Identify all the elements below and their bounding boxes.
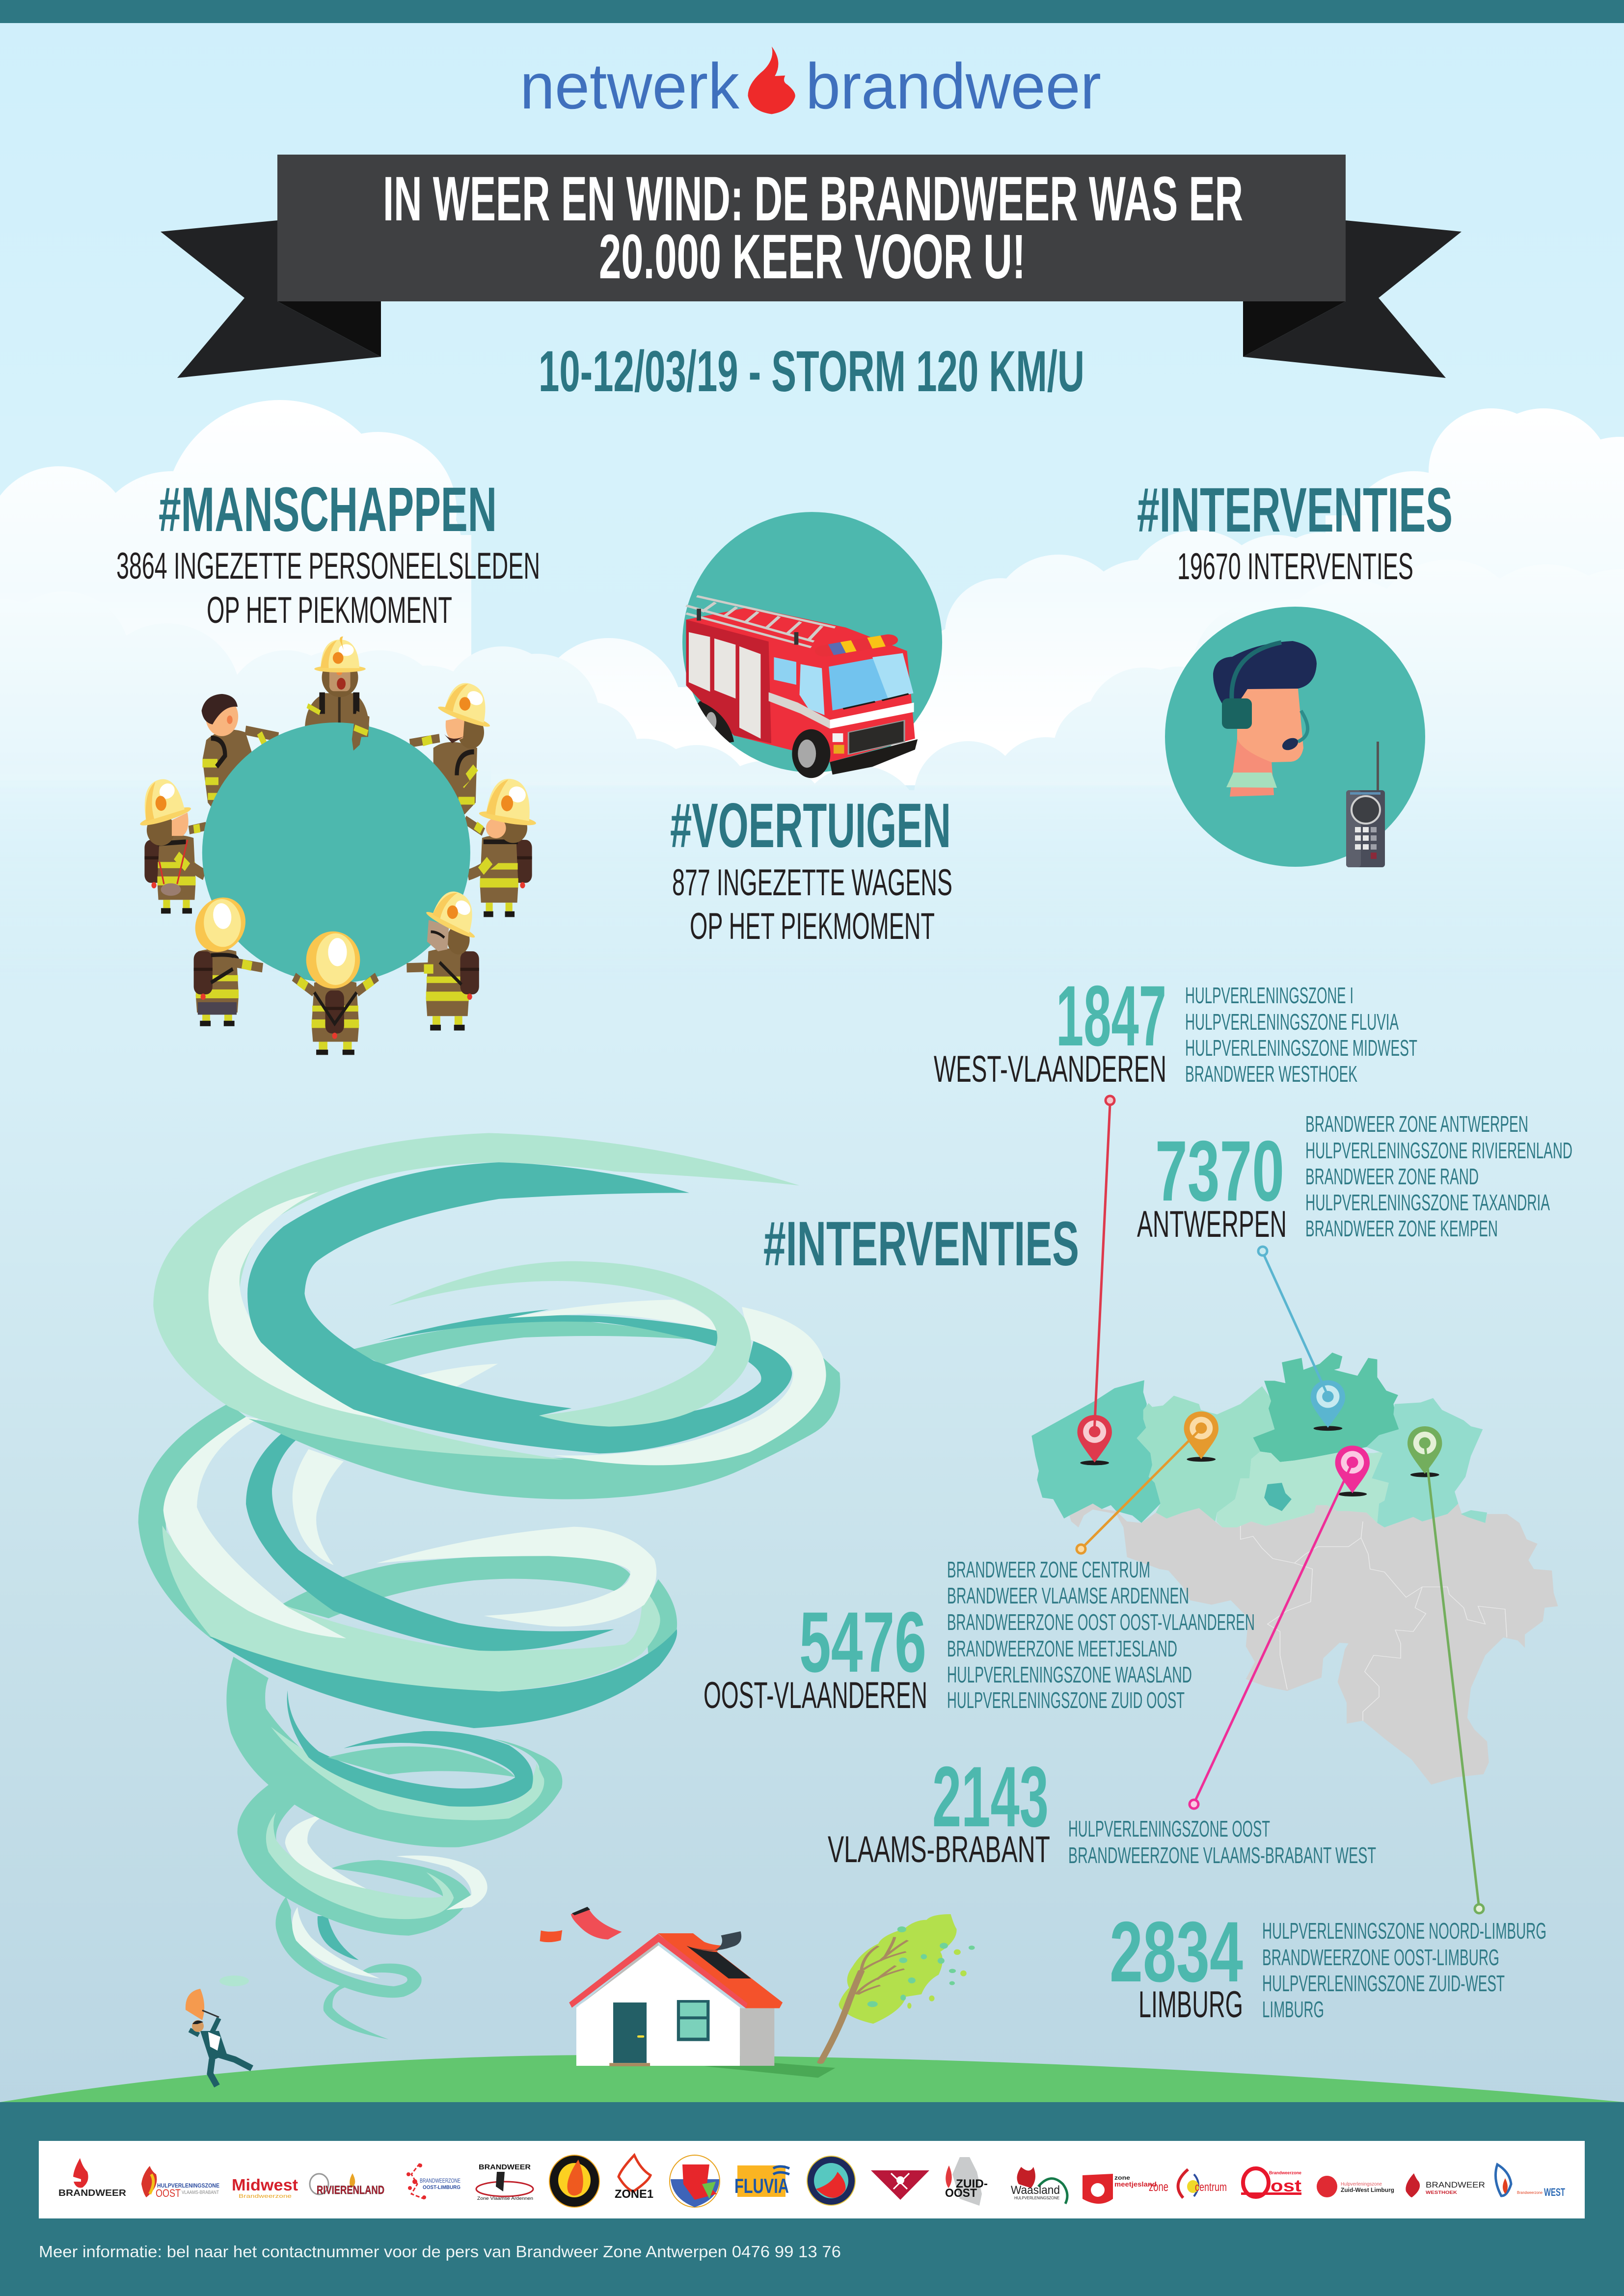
region: Oost-Vlaanderen: BRANDWEER ZONE CENTRUM xyxy=(947,1557,1150,1582)
text: manschappen stat xyxy=(116,545,540,631)
logo: Zuid-Oost: ZUID- xyxy=(956,2177,988,2190)
region: Antwerpen: BRANDWEER ZONE RAND xyxy=(1305,1164,1479,1189)
logo: Centrum xyxy=(1149,2169,1227,2198)
tornado: top ring xyxy=(153,1133,840,1499)
firefighter: top xyxy=(305,637,369,736)
firefighters circle illustration xyxy=(133,637,541,1055)
green ground hill xyxy=(0,2055,1624,2106)
logo: Fluvia: FLUVIA xyxy=(734,2174,789,2197)
region: West-Vlaanderen: 1847 xyxy=(1056,968,1166,1064)
logo: Rivierenland: RIVIERENLAND xyxy=(317,2184,384,2197)
fire truck illustration xyxy=(682,512,942,778)
firefighter: bottom xyxy=(294,932,377,1055)
logo: Zone1: ZONE1 xyxy=(615,2188,653,2201)
flying shingle red xyxy=(571,1907,622,1940)
logo: Zuid-Oost: OOST xyxy=(945,2187,977,2200)
region: Vlaams-Brabant: 2143 xyxy=(932,1749,1049,1845)
firefighter: bottom left xyxy=(189,889,263,1026)
tornado: second ring xyxy=(138,1403,677,1728)
logo: Taxandria xyxy=(549,2155,599,2207)
pin: Limburg xyxy=(1407,1426,1442,1477)
region: West-Vlaanderen: HULPVERLENINGSZONE MIDWEST xyxy=(1185,1035,1417,1061)
truck xyxy=(686,596,918,778)
hair xyxy=(1213,641,1317,714)
footer contact text: Meer informatie: bel naar het contactnummer voor de pers van Brandweer Zone Antwerpen 0476 99 13 76 xyxy=(39,2243,841,2261)
logo: Hulpverleningszone Oost: HULPVERLENINGSZONE xyxy=(157,2182,219,2189)
wind-blown tree xyxy=(820,1914,975,2062)
leader line: Oost-Vlaanderen xyxy=(1077,1428,1201,1553)
pin: Antwerpen xyxy=(1311,1380,1345,1431)
firefighter: right xyxy=(464,774,541,917)
logo: Zuid-West Limburg xyxy=(1317,2176,1394,2197)
arm band xyxy=(354,727,368,733)
logo: Brandweerzone Oost: ost xyxy=(1271,2177,1301,2195)
roof inner edge xyxy=(657,1934,748,2008)
logo: Rivierenland xyxy=(310,2173,384,2197)
teal circle xyxy=(202,722,470,983)
door step xyxy=(609,2063,650,2066)
logo: Vlaamse Ardennen: Zone Vlaamse Ardennen xyxy=(477,2196,533,2201)
region: Oost-Vlaanderen: BRANDWEER VLAAMSE ARDENNEN xyxy=(947,1583,1189,1608)
map: Voeren xyxy=(1461,1510,1487,1523)
footer band xyxy=(0,2102,1624,2296)
clouds: front layer xyxy=(0,646,1624,820)
logo: Oost-Limburg xyxy=(406,2163,460,2199)
logo: Hulpverleningszone Oost: VLAAMS-BRABANT xyxy=(182,2190,219,2195)
region: Vlaams-Brabant: VLAAMS-BRABANT xyxy=(828,1829,1050,1870)
leader line: Antwerpen xyxy=(1258,1247,1328,1396)
map: Brussels xyxy=(1264,1483,1292,1511)
side wall xyxy=(740,2008,774,2066)
walls xyxy=(576,1945,740,2066)
region: Oost-Vlaanderen: HULPVERLENINGSZONE WAASLAND xyxy=(947,1662,1192,1687)
flying shingle orange xyxy=(540,1930,562,1942)
text: voertuigen stat xyxy=(672,862,952,947)
text: manschappen stat: 3864 INGEZETTE PERSONEELSLEDEN xyxy=(116,545,540,587)
logo: Centrum: centrum xyxy=(1195,2181,1227,2194)
door knob xyxy=(637,2035,644,2038)
logo: Waasland: HULPVERLENINGSZONE xyxy=(1014,2196,1059,2200)
headset xyxy=(1232,642,1281,699)
foliage xyxy=(839,1914,957,2024)
heading: voertuigen: #VOERTUIGEN xyxy=(670,791,951,861)
tornado: third ring xyxy=(226,1656,562,1847)
leader line: Limburg xyxy=(1425,1443,1484,1913)
region: Oost-Vlaanderen xyxy=(704,1557,1255,1716)
region: Limburg: 2834 xyxy=(1110,1904,1243,2000)
pin: Oost-Vlaanderen xyxy=(1184,1412,1218,1462)
logo: Kempen xyxy=(807,2156,855,2205)
text: manschappen stat: OP HET PIEKMOMENT xyxy=(207,589,452,631)
logo: Hulpverleningszone Oost: OOST xyxy=(156,2187,181,2199)
logo: netwerk brandweer: brandweer xyxy=(806,50,1101,122)
logo: Midwest: Brandweerzone xyxy=(239,2193,292,2199)
region: Antwerpen: 7370 xyxy=(1155,1123,1284,1219)
title ribbon: 20.000 KEER VOOR U! xyxy=(599,222,1026,292)
clouds: back layer xyxy=(0,400,1624,785)
pin: Vlaams-Brabant xyxy=(1335,1445,1370,1496)
map: Vlaams-Brabant xyxy=(1217,1452,1389,1527)
region: Oost-Vlaanderen: 5476 xyxy=(799,1595,926,1690)
logo: Waasland xyxy=(1011,2167,1067,2204)
logo: Westhoek xyxy=(1406,2173,1485,2197)
region: West-Vlaanderen: WEST-VLAANDEREN xyxy=(934,1048,1166,1090)
logo: Brandweer xyxy=(58,2158,126,2198)
roof hole xyxy=(686,1946,751,1978)
logo: Zuid-West Limburg: Zuid-West Limburg xyxy=(1341,2187,1394,2193)
region: Oost-Vlaanderen: OOST-VLAANDEREN xyxy=(704,1675,927,1716)
curled roof strip xyxy=(686,1933,722,1952)
logo: Meetjesland: meetjesland xyxy=(1114,2180,1157,2188)
collar xyxy=(1226,773,1277,788)
logo: West: Brandweerzone xyxy=(1517,2190,1543,2195)
tornado illustration xyxy=(138,1133,840,2039)
map: Wallonia grey xyxy=(1069,1504,1558,1785)
top firefighter arm xyxy=(352,711,370,750)
logo: Meetjesland: zone xyxy=(1114,2174,1130,2181)
logo: Midwest: Midwest xyxy=(232,2176,298,2194)
mic head xyxy=(1280,736,1300,752)
heading: interventies: #INTERVENTIES xyxy=(1137,475,1453,545)
house with damaged roof xyxy=(540,1907,836,2078)
region: Oost-Vlaanderen: HULPVERLENINGSZONE ZUID OOST xyxy=(947,1687,1185,1713)
pin: West-Vlaanderen xyxy=(1077,1415,1112,1465)
logo: Fluvia xyxy=(734,2165,789,2197)
firefighter: top left xyxy=(202,694,278,808)
region: West-Vlaanderen: HULPVERLENINGSZONE FLUVIA xyxy=(1185,1009,1399,1035)
heading: manschappen: #MANSCHAPPEN xyxy=(159,475,497,545)
map: Oost-Vlaanderen xyxy=(1137,1386,1274,1522)
region: Antwerpen: ANTWERPEN xyxy=(1137,1203,1287,1245)
region: Vlaams-Brabant xyxy=(828,1749,1376,1870)
date and storm subtitle: 10-12/03/19 - STORM 120 KM/U xyxy=(539,339,1084,404)
roof left edge xyxy=(569,1934,660,2008)
logo strip xyxy=(39,2141,1585,2218)
logo: Oost-Limburg: OOST-LIMBURG xyxy=(423,2185,460,2190)
logo: Westhoek: BRANDWEER xyxy=(1426,2180,1485,2189)
top bar xyxy=(0,0,1624,23)
logo: Brandweerzone Oost: Brandweerzone xyxy=(1269,2170,1301,2175)
roof right xyxy=(658,1933,783,2008)
logo: West xyxy=(1495,2164,1565,2198)
curled dark strip xyxy=(691,1931,741,1950)
ear cup xyxy=(1222,698,1252,729)
region: Limburg: LIMBURG xyxy=(1262,1997,1324,2022)
leader line: Vlaams-Brabant xyxy=(1190,1463,1353,1809)
microphone xyxy=(1298,711,1308,742)
logo: Vlaamse Ardennen: BRANDWEER xyxy=(479,2163,531,2171)
logo: Zuid-West Limburg: Hulpverleningszone xyxy=(1341,2182,1382,2187)
text: interventies stat: 19670 INTERVENTIES xyxy=(1177,546,1413,587)
face xyxy=(1237,689,1303,762)
firefighter: top right xyxy=(410,675,497,814)
radio xyxy=(1346,742,1385,867)
text: voertuigen stat: OP HET PIEKMOMENT xyxy=(690,906,935,947)
logo: Vlaamse Ardennen xyxy=(476,2163,533,2201)
logo: Waasland: Waasland xyxy=(1011,2184,1060,2197)
region: Oost-Vlaanderen: BRANDWEERZONE OOST OOST-VLAANDEREN xyxy=(947,1609,1255,1635)
logo: netwerk brandweer: netwerk xyxy=(520,50,740,122)
logo: Westhoek: WESTHOEK xyxy=(1426,2190,1458,2195)
map of Belgium xyxy=(1031,1353,1558,1785)
leaves xyxy=(867,1926,975,2007)
trunk and branches xyxy=(820,1972,861,2062)
teal circle xyxy=(682,512,942,773)
map: Limburg xyxy=(1366,1398,1483,1527)
text: voertuigen stat: 877 INGEZETTE WAGENS xyxy=(672,862,952,904)
logo: Oost-Limburg: BRANDWEERZONE xyxy=(420,2177,460,2184)
logo: Brandweer: BRANDWEER xyxy=(58,2188,126,2198)
door xyxy=(613,2002,647,2063)
region: Vlaams-Brabant: BRANDWEERZONE VLAAMS-BRABANT WEST xyxy=(1068,1842,1376,1868)
tornado: tail and lower rings xyxy=(238,1785,487,2039)
firefighter: left xyxy=(133,772,206,913)
map: West-Vlaanderen xyxy=(1031,1380,1161,1523)
logo: West: WEST xyxy=(1544,2186,1565,2198)
region: Limburg xyxy=(1110,1904,1546,2026)
region: West-Vlaanderen: HULPVERLENINGSZONE I xyxy=(1185,983,1353,1008)
region: Oost-Vlaanderen: BRANDWEERZONE MEETJESLAND xyxy=(947,1636,1177,1661)
window xyxy=(677,2000,709,2041)
logo: netwerk brandweer xyxy=(520,47,1101,122)
man with umbrella xyxy=(186,1976,252,2086)
map: Antwerpen xyxy=(1253,1353,1399,1462)
roof left xyxy=(576,1941,659,2008)
region: Antwerpen: BRANDWEER ZONE KEMPEN xyxy=(1305,1216,1498,1241)
logo: Meetjesland xyxy=(1083,2174,1157,2204)
leader line: West-Vlaanderen xyxy=(1094,1096,1114,1432)
title ribbon xyxy=(161,155,1462,378)
region: West-Vlaanderen xyxy=(934,968,1417,1090)
region: Limburg: LIMBURG xyxy=(1138,1984,1243,2026)
logo: Zuid-Oost xyxy=(945,2157,988,2206)
operator with headset illustration xyxy=(1165,607,1425,867)
white strip xyxy=(39,2141,1585,2218)
falling leaves xyxy=(907,1949,967,2009)
neck xyxy=(1230,739,1274,797)
logo: Brandweerzone Oost xyxy=(1241,2168,1301,2197)
logo: Noord-Limburg xyxy=(670,2155,720,2207)
heading: interventies per provincie: #INTERVENTIES xyxy=(763,1209,1079,1279)
region: West-Vlaanderen: BRANDWEER WESTHOEK xyxy=(1185,1061,1357,1087)
firefighter: bottom right xyxy=(406,881,485,1031)
house shadow xyxy=(704,2063,836,2078)
logo: triangle xyxy=(871,2170,929,2200)
region: Antwerpen xyxy=(1137,1111,1572,1245)
logo: Centrum: zone xyxy=(1149,2179,1168,2194)
map: province borders xyxy=(1241,1522,1507,1721)
logo: Zone1 xyxy=(615,2155,653,2201)
teal circle xyxy=(1165,607,1425,867)
region: Vlaams-Brabant: HULPVERLENINGSZONE OOST xyxy=(1068,1816,1270,1842)
logo: Hulpverleningszone Oost xyxy=(141,2166,219,2199)
